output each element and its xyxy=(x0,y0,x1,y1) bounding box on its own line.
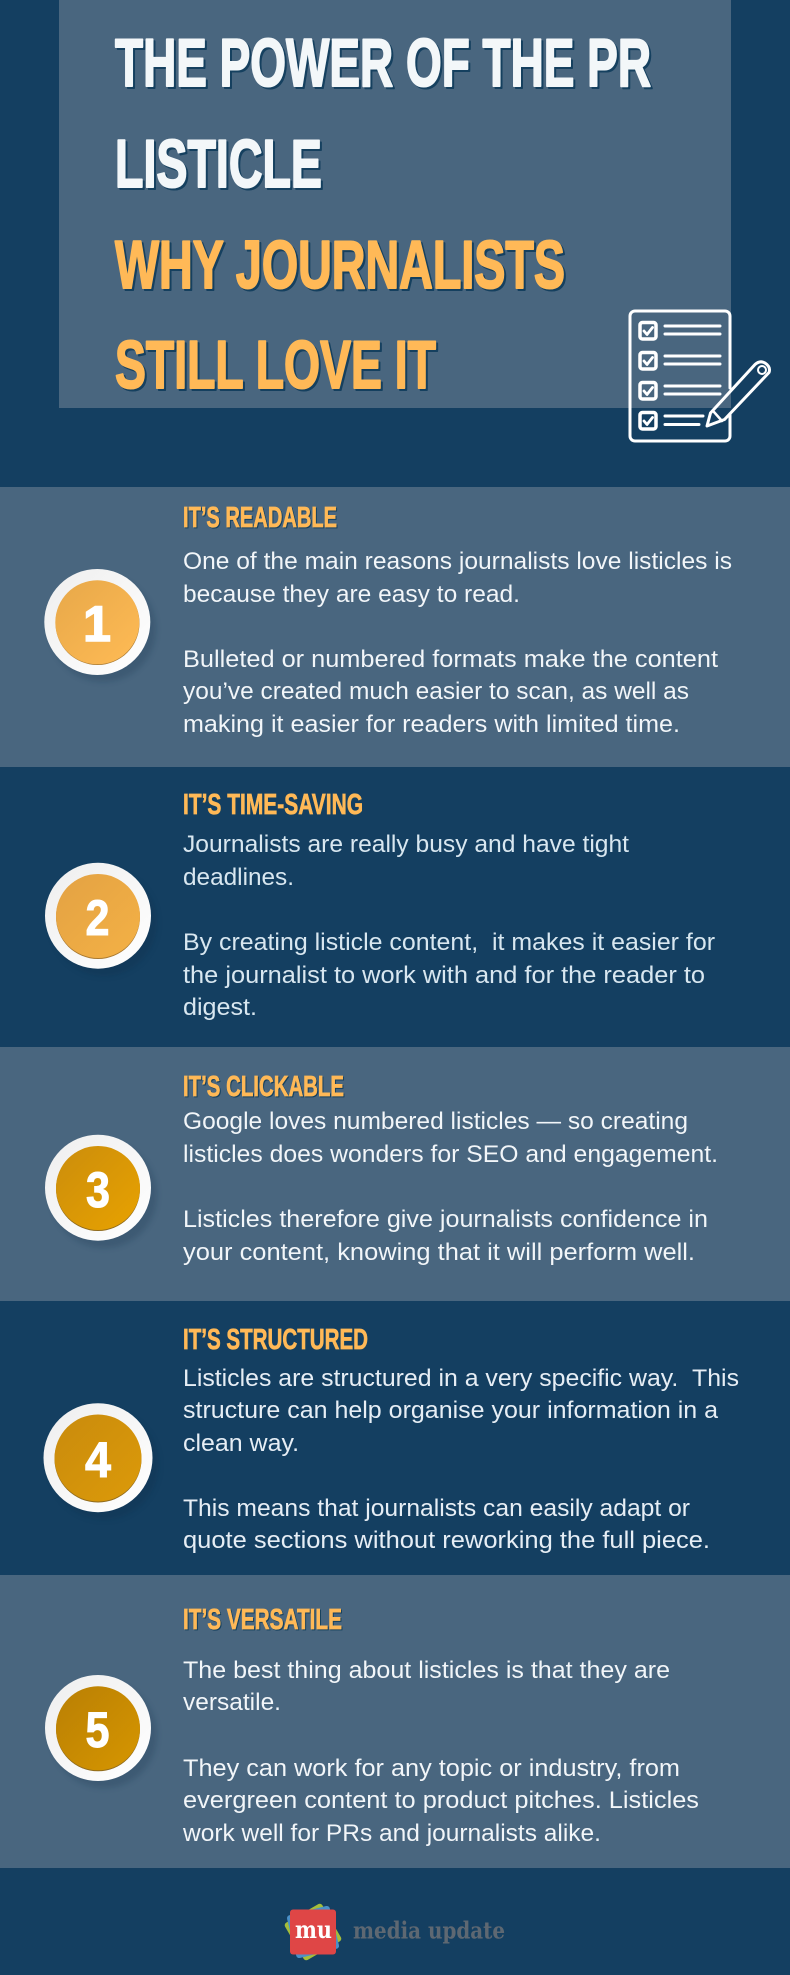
number badge 1 xyxy=(44,569,156,682)
body text: because they are easy to read. xyxy=(183,581,520,608)
number badge 1: 1 xyxy=(83,596,111,652)
number badge 5: 5 xyxy=(86,1702,110,1758)
title: LISTICLE xyxy=(115,126,322,202)
icon: logo mark: mu xyxy=(295,1915,332,1944)
body text: making it easier for readers with limited time. xyxy=(183,711,680,738)
icon: logo mark xyxy=(284,1903,342,1961)
body text: The best thing about listicles is that they are xyxy=(183,1657,670,1684)
number badge 3: 3 xyxy=(86,1162,110,1218)
logo: media update xyxy=(284,1903,505,1961)
body text: quote sections without reworking the full piece. xyxy=(183,1527,710,1554)
icon: checklist and pencil xyxy=(630,311,770,441)
heading: IT’S VERSATILE xyxy=(183,1604,342,1636)
body text: structure can help organise your information in a xyxy=(183,1397,719,1424)
number badge 5 xyxy=(45,1675,157,1788)
body text: the journalist to work with and for the reader to xyxy=(183,962,705,989)
panel: row 2 xyxy=(0,767,790,1047)
heading: IT’S STRUCTURED xyxy=(183,1324,368,1356)
body text: work well for PRs and journalists alike. xyxy=(182,1820,601,1847)
body text: Journalists are really busy and have tight xyxy=(183,831,629,858)
title xyxy=(115,25,651,403)
body text xyxy=(182,1657,699,1847)
panel: row 5 xyxy=(0,1575,790,1868)
body text: your content, knowing that it will perform well. xyxy=(183,1239,695,1266)
body text: clean way. xyxy=(183,1430,299,1457)
panel: title xyxy=(59,0,731,408)
body text: One of the main reasons journalists love listicles is xyxy=(183,548,732,575)
body text: evergreen content to product pitches. Listicles xyxy=(183,1787,699,1814)
body text: deadlines. xyxy=(183,864,294,891)
number badge 2: 2 xyxy=(86,890,110,946)
number badge 2 xyxy=(45,863,157,976)
body text: Bulleted or numbered formats make the content xyxy=(183,646,718,673)
panel: row 4 xyxy=(0,1301,790,1575)
panel: row 1 xyxy=(0,487,790,767)
body text xyxy=(183,831,715,1021)
number badge 4: 4 xyxy=(85,1432,111,1488)
body text: Google loves numbered listicles — so creating xyxy=(183,1108,688,1135)
body text: They can work for any topic or industry, from xyxy=(183,1755,680,1782)
body text: Listicles therefore give journalists confidence in xyxy=(183,1206,708,1233)
number badge 3 xyxy=(45,1135,157,1248)
heading: IT’S READABLE xyxy=(183,502,337,534)
body text: Listicles are structured in a very specific way. This xyxy=(183,1365,739,1392)
number badge 4 xyxy=(44,1403,158,1520)
body text: By creating listicle content, it makes it easier for xyxy=(183,929,715,956)
body text: you’ve created much easier to scan, as well as xyxy=(183,678,689,705)
body text xyxy=(183,548,732,738)
body text: This means that journalists can easily adapt or xyxy=(183,1495,690,1522)
body text: listicles does wonders for SEO and engagement. xyxy=(183,1141,718,1168)
title: WHY JOURNALISTS xyxy=(115,227,565,303)
panel: row 3 xyxy=(0,1047,790,1301)
body text: versatile. xyxy=(183,1689,281,1716)
heading: IT’S TIME-SAVING xyxy=(183,789,363,821)
heading: IT’S CLICKABLE xyxy=(183,1071,344,1103)
logo wordmark: media update xyxy=(353,1918,505,1944)
body text: digest. xyxy=(183,994,257,1021)
title: STILL LOVE IT xyxy=(115,327,436,403)
body text xyxy=(183,1365,739,1554)
body text xyxy=(183,1108,718,1266)
